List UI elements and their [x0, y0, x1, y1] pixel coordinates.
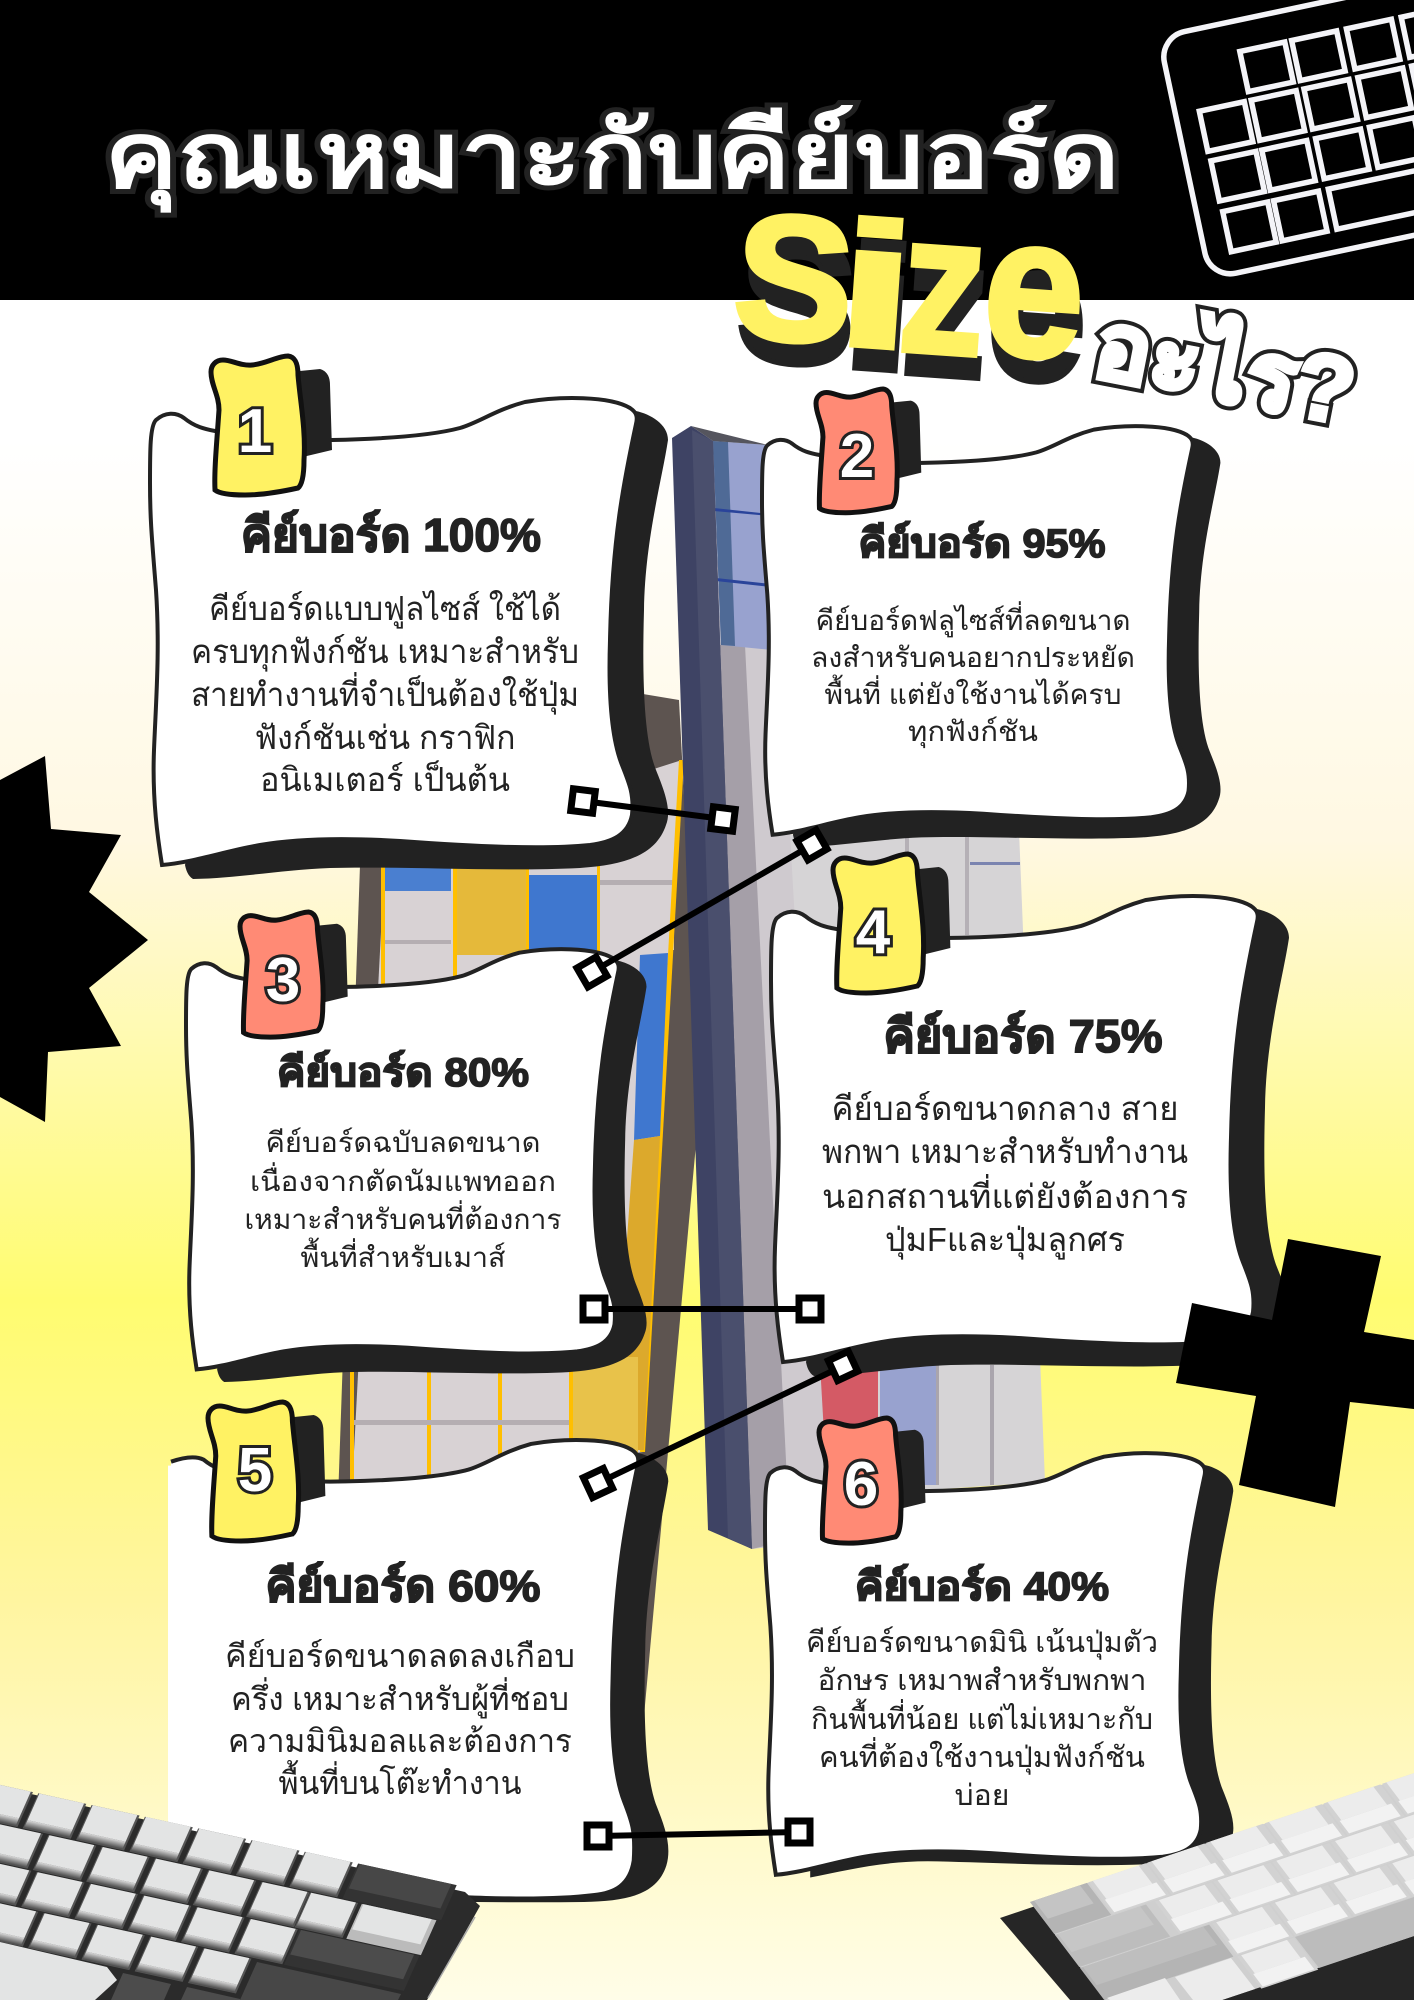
Size shadow: e [980, 197, 1095, 426]
body text 2: พื้นที่ แต่ยังใช้งานได้ครบ [824, 674, 1122, 710]
heading 1: คีย์บอร์ด 100% [241, 509, 541, 561]
body text 3 [244, 1127, 562, 1273]
heading 6: คีย์บอร์ด 40% [855, 1564, 1109, 1609]
Size shadow: i [833, 207, 926, 411]
tab 1 [211, 356, 332, 495]
panel: keyboard 60% [171, 1402, 668, 1902]
body text 2: ทุกฟังก์ชัน [908, 716, 1038, 749]
tab 3 [240, 912, 348, 1037]
body text 5 [225, 1638, 575, 1801]
body text 5: ครึ่ง เหมาะสำหรับผู้ที่ชอบ [231, 1677, 569, 1719]
title word Size [728, 171, 1095, 426]
heading 3: คีย์บอร์ด 80% [277, 1050, 529, 1095]
title word อะไร?: อะไร? [1086, 291, 1364, 445]
tab 5: 5 [238, 1436, 272, 1505]
left keyboard plane [329, 694, 700, 1760]
body text 4: คีย์บอร์ดขนาดกลาง สาย [832, 1090, 1178, 1127]
tab 6: 6 [844, 1450, 878, 1519]
panel: keyboard 80% [186, 912, 647, 1382]
tab 2: 2 [840, 422, 874, 491]
body text 3: เหมาะสำหรับคนที่ต้องการ [244, 1200, 562, 1235]
body text 2: คีย์บอร์ดฟลูไซส์ที่ลดขนาด [816, 601, 1130, 638]
navy side wall [672, 426, 752, 1549]
body text 4 [822, 1090, 1188, 1260]
tab 3: 3 [266, 946, 300, 1015]
panel 3 card [186, 949, 647, 1382]
panel: keyboard 40% [765, 1418, 1233, 1878]
tab 4 [833, 854, 950, 993]
body text 1: สายทำงานที่จำเป็นต้องใช้ปุ่ม [191, 672, 579, 715]
connector 5-6 [587, 1821, 810, 1847]
panel 5 card [171, 1440, 668, 1902]
keyboard photo bottom left [0, 1777, 480, 2000]
decorative plus shape [1176, 1239, 1414, 1507]
body text 3: คีย์บอร์ดฉบับลดขนาด [266, 1127, 540, 1158]
decorative burst shape [0, 756, 148, 1122]
body text 6: คีย์บอร์ดขนาดมินิ เน้นปุ่มตัว [806, 1626, 1158, 1660]
body text 3: เนื่องจากตัดนัมแพทออก [250, 1162, 556, 1197]
Size shadow: S [731, 198, 863, 405]
tab 2 [816, 389, 921, 513]
heading 4: คีย์บอร์ด 75% [884, 1010, 1162, 1062]
body text 6 [806, 1626, 1158, 1812]
connectors [571, 789, 858, 1847]
Size letters [728, 171, 1092, 402]
body text 1: ฟังก์ชันเช่น กราฟิก [254, 719, 516, 756]
tab 1: 1 [238, 397, 272, 466]
Size letters: i [830, 184, 923, 388]
icon: keyboard outline [1159, 0, 1414, 279]
heading 2: คีย์บอร์ด 95% [858, 521, 1106, 566]
body text 3: พื้นที่สำหรับเมาส์ [300, 1237, 506, 1273]
panel: keyboard 95% [762, 389, 1221, 847]
panel 6 card [765, 1453, 1233, 1878]
body text 6: บ่อย [954, 1780, 1010, 1812]
tab 4: 4 [856, 898, 891, 967]
panel: keyboard 75% [771, 854, 1289, 1376]
panel 1 card [150, 398, 668, 879]
keyboard photo bottom right [1000, 1765, 1414, 2000]
Size letters: z [894, 171, 994, 399]
body text 4: ปุ่มFและปุ่มลูกศร [885, 1221, 1125, 1260]
body text 4: พกพา เหมาะสำหรับทำงาน [822, 1133, 1188, 1170]
body text 6: อักษร เหมาพสำหรับพกพา [818, 1665, 1146, 1697]
panel 2 card [762, 426, 1221, 847]
title line: คุณเหมาะกับคีย์บอร์ด [104, 104, 1120, 213]
header band [0, 0, 1414, 300]
title word อะไร?: อะไร? [1086, 291, 1364, 445]
Size shadow: z [897, 194, 997, 422]
tab 6 [819, 1418, 925, 1543]
body text 6: คนที่ต้องใช้งานปุ่มฟังก์ชัน [819, 1737, 1145, 1775]
connector 3-4 [583, 1298, 821, 1320]
body text 4: นอกสถานที่แต่ยังต้องการ [822, 1174, 1188, 1215]
connector 2-3 [577, 830, 827, 987]
body text 1: อนิเมเตอร์ เป็นต้น [260, 760, 510, 798]
right keyboard plane [770, 830, 1045, 1500]
tab 5 [208, 1402, 325, 1541]
connector 4-5 [583, 1351, 858, 1498]
vertical 3D keyboard [329, 426, 1045, 1760]
body text 5: พื้นที่บนโต๊ะทำงาน [278, 1760, 522, 1801]
body text 2: ลงสำหรับคนอยากประหยัด [811, 642, 1135, 673]
body text 5: ความมินิมอลและต้องการ [228, 1723, 572, 1759]
body text 1: คีย์บอร์ดแบบฟูลไซส์ ใช้ได้ [209, 590, 561, 629]
body text 1: ครบทุกฟังก์ชัน เหมาะสำหรับ [191, 633, 579, 672]
Size letters: S [728, 175, 860, 382]
panel 4 card [771, 896, 1289, 1376]
heading 5: คีย์บอร์ด 60% [266, 1561, 540, 1611]
body text 1 [191, 590, 579, 798]
connector 1-2 [571, 789, 735, 831]
centre key column [713, 441, 830, 1549]
Size letters: e [977, 173, 1092, 402]
Size shadow [731, 194, 1095, 426]
panel: keyboard 100% [150, 356, 668, 879]
body text 5: คีย์บอร์ดขนาดลดลงเกือบ [225, 1638, 575, 1674]
body text 2 [811, 601, 1135, 749]
body text 6: กินพื้นที่น้อย แต่ไม่เหมาะกับ [811, 1698, 1153, 1736]
